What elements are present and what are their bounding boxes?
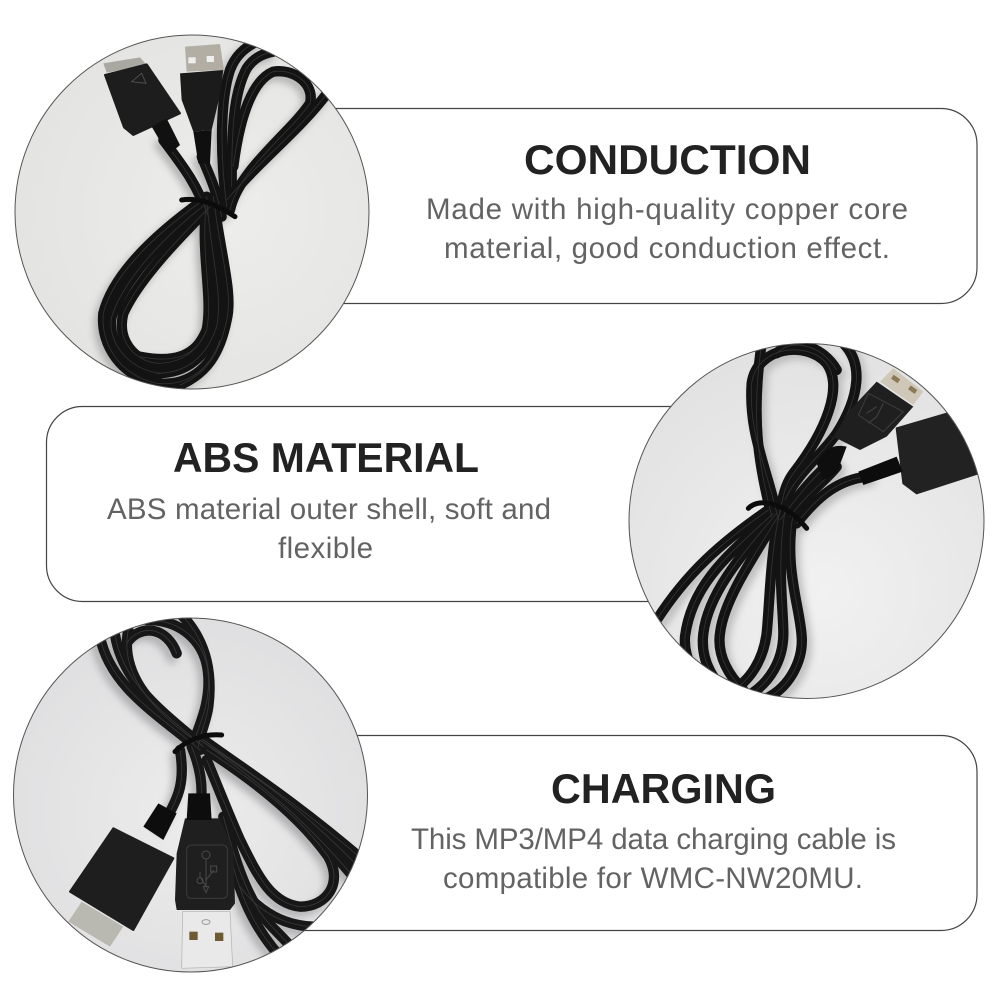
text block: charging description xyxy=(411,823,896,895)
icon: usb connector xyxy=(817,368,923,480)
tie xyxy=(182,199,235,217)
icon: usb symbol xyxy=(197,851,217,893)
text block: abs material description: ABS material outer shell, soft and xyxy=(107,493,551,526)
panel outline: charging xyxy=(150,736,977,930)
text block: conduction description xyxy=(426,193,908,265)
icon: micro connector xyxy=(103,57,180,155)
icon: micro connector xyxy=(68,803,177,947)
photo circle: coiled cable with usb at upper right xyxy=(629,343,984,703)
heading: abs material: ABS MATERIAL xyxy=(173,434,479,481)
photo circle: coiled cable with connectors at bottom xyxy=(14,613,368,972)
text block: abs material description xyxy=(107,493,551,565)
tie xyxy=(175,735,222,752)
photo circle: coiled cable with connectors at top xyxy=(15,35,369,390)
icon: usb connector xyxy=(180,44,224,163)
text block: abs material description: flexible xyxy=(278,532,373,565)
text block: conduction description: material, good conduction effect. xyxy=(444,232,890,265)
panel outline: conduction xyxy=(150,108,977,304)
heading: conduction: CONDUCTION xyxy=(524,136,811,183)
text block: charging description: compatible for WMC-NW20MU. xyxy=(443,862,863,895)
text block: conduction description: Made with high-quality copper core xyxy=(426,193,908,226)
heading: charging: CHARGING xyxy=(551,765,776,812)
icon: micro connector xyxy=(858,412,983,493)
tie xyxy=(748,503,807,528)
panel: conduction xyxy=(150,108,977,304)
icon: usb connector xyxy=(175,793,235,968)
panel: abs material xyxy=(46,406,846,602)
panel: charging xyxy=(150,736,977,930)
panel outline: abs material xyxy=(46,406,846,602)
text block: charging description: This MP3/MP4 data charging cable is xyxy=(411,823,896,856)
